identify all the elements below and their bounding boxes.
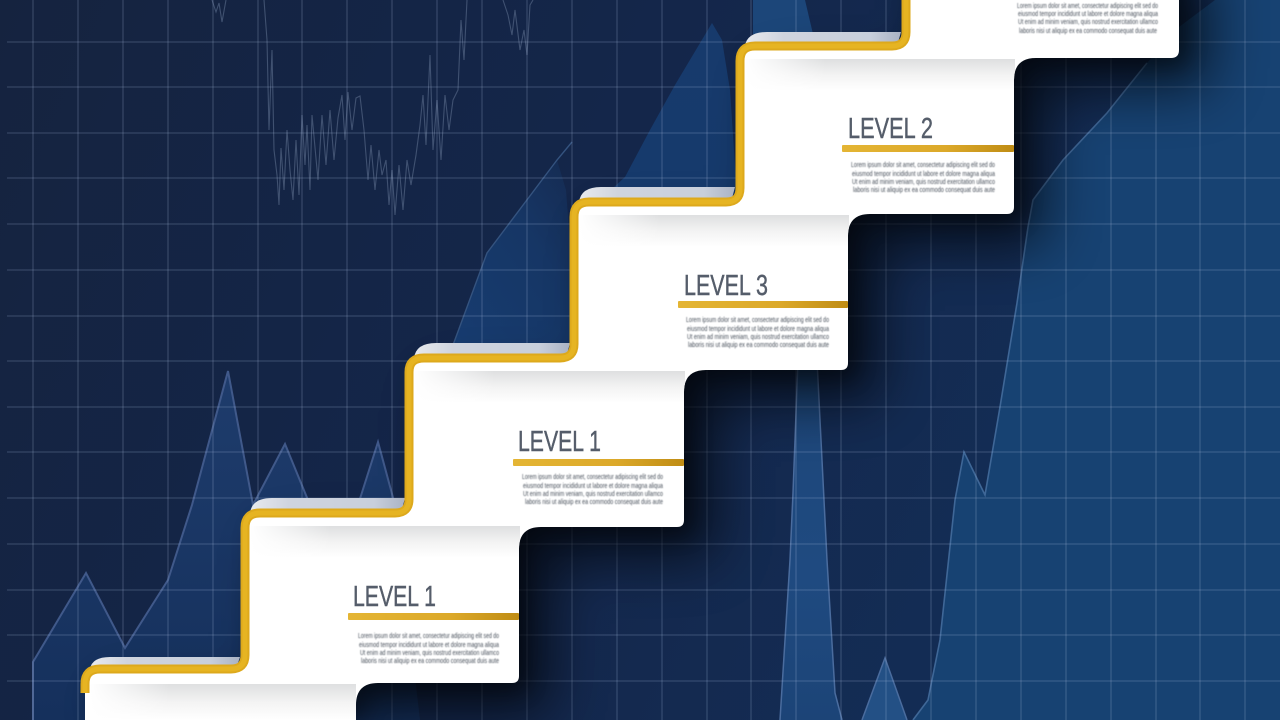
heading: LEVEL 1 xyxy=(353,581,436,613)
body text: eiusmod tempor incididunt ut labore et dolore magna aliqua xyxy=(359,640,500,649)
body text xyxy=(686,315,830,349)
gold rule xyxy=(678,301,848,308)
step: top body text: laboris nisi ut aliquip ex ea commodo consequat duis aute xyxy=(1019,26,1157,35)
body text: Ut enim ad minim veniam, quis nostrud exercitation ullamco xyxy=(523,489,663,498)
body text: laboris nisi ut aliquip ex ea commodo consequat duis aute xyxy=(361,656,499,665)
gold rule xyxy=(348,613,519,620)
area chart: centre rising slope xyxy=(453,23,737,345)
body text: laboris nisi ut aliquip ex ea commodo consequat duis aute xyxy=(525,497,663,506)
area chart: centre spike xyxy=(780,360,842,720)
heading: LEVEL 1 xyxy=(518,426,601,458)
body text: Lorem ipsum dolor sit amet, consectetur adipiscing elit sed do xyxy=(686,315,829,324)
step: level 2 xyxy=(842,113,1014,194)
step: second level 1 xyxy=(513,426,684,506)
body text: laboris nisi ut aliquip ex ea commodo consequat duis aute xyxy=(688,340,829,349)
step: top body text: eiusmod tempor incididunt ut labore et dolore magna aliqua xyxy=(1018,9,1159,18)
body text: Ut enim ad minim veniam, quis nostrud exercitation ullamco xyxy=(852,177,995,186)
area chart: left mountains xyxy=(33,371,420,720)
gold staircase ribbon xyxy=(85,0,906,693)
body text: Ut enim ad minim veniam, quis nostrud exercitation ullamco xyxy=(360,648,499,657)
step: top body text: Lorem ipsum dolor sit amet, consectetur adipiscing elit sed do xyxy=(1017,1,1158,10)
gold rule xyxy=(842,145,1014,152)
body text: Lorem ipsum dolor sit amet, consectetur adipiscing elit sed do xyxy=(851,160,995,169)
area chart: small peak xyxy=(862,658,907,720)
body text: eiusmod tempor incididunt ut labore et dolore magna aliqua xyxy=(687,324,830,333)
step: top body text xyxy=(1017,1,1159,35)
area chart: top peak xyxy=(753,0,813,34)
step shading under each tread xyxy=(90,59,1015,720)
price line chart xyxy=(212,0,533,215)
body text xyxy=(522,472,664,506)
heading: LEVEL 2 xyxy=(848,113,933,145)
step: first level 1 xyxy=(348,581,519,665)
body text: Lorem ipsum dolor sit amet, consectetur adipiscing elit sed do xyxy=(522,472,663,481)
step: top body text: Ut enim ad minim veniam, quis nostrud exercitation ullamco xyxy=(1018,17,1158,26)
area chart: large right area xyxy=(913,0,1280,720)
body text: Lorem ipsum dolor sit amet, consectetur adipiscing elit sed do xyxy=(358,631,499,640)
body text: eiusmod tempor incididunt ut labore et dolore magna aliqua xyxy=(523,481,664,490)
body text: laboris nisi ut aliquip ex ea commodo consequat duis aute xyxy=(853,185,995,194)
body text: eiusmod tempor incididunt ut labore et dolore magna aliqua xyxy=(852,169,996,178)
heading: LEVEL 3 xyxy=(684,270,768,302)
body text: Ut enim ad minim veniam, quis nostrud exercitation ullamco xyxy=(687,332,829,341)
step: level 3 xyxy=(678,270,848,349)
body text xyxy=(358,631,500,665)
body text xyxy=(851,160,996,194)
silver bevels above the steps xyxy=(90,32,901,669)
gold rule xyxy=(513,459,684,466)
